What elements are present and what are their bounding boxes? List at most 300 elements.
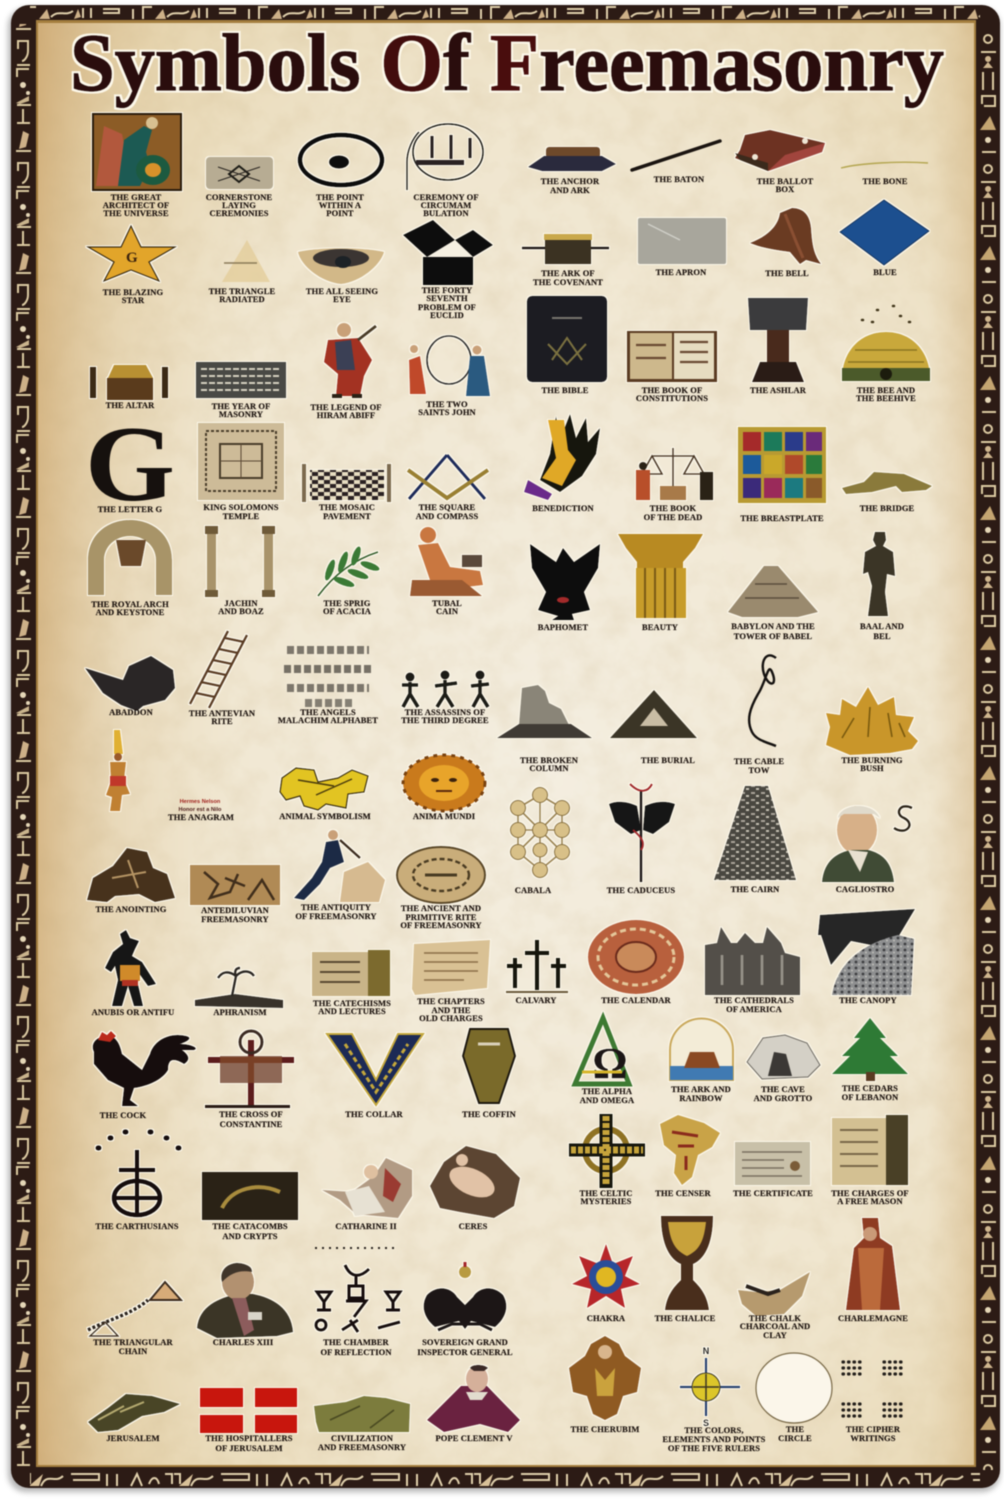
label: POPE CLEMENT V bbox=[435, 1433, 513, 1443]
label: CIRCUMAM bbox=[421, 200, 471, 210]
label: THE BEE AND bbox=[857, 385, 915, 395]
icon: eye bbox=[298, 248, 384, 284]
icon: map fragment bbox=[190, 865, 280, 905]
label: RAINBOW bbox=[679, 1093, 723, 1103]
icon: ark with poles bbox=[522, 234, 609, 264]
label: EUCLID bbox=[430, 310, 464, 320]
icon: robed king bbox=[846, 1218, 900, 1310]
label: OF JERUSALEM bbox=[215, 1443, 283, 1453]
icon: double headed eagle bbox=[424, 1262, 506, 1330]
symbol: babylon tower bbox=[728, 566, 818, 641]
label: THE GREAT bbox=[111, 192, 162, 202]
label: STAR bbox=[122, 295, 145, 305]
symbol: ballot box bbox=[735, 130, 825, 194]
icon: coffin bbox=[463, 1029, 515, 1103]
label: THE CIPHER bbox=[846, 1424, 901, 1434]
label: THE BELL bbox=[765, 268, 809, 278]
label: THE CENSER bbox=[655, 1188, 712, 1198]
symbol: anagram bbox=[106, 730, 234, 822]
label: CONSTANTINE bbox=[220, 1119, 283, 1129]
symbol: chalk charcoal and clay bbox=[738, 1272, 810, 1340]
icon: celtic cross bbox=[569, 1114, 645, 1188]
symbol: anima mundi bbox=[403, 755, 485, 821]
label: AND KEYSTONE bbox=[96, 607, 165, 617]
symbol: certificate bbox=[733, 1142, 813, 1198]
symbol: anointing bbox=[87, 848, 175, 914]
symbol: book of constitutions bbox=[627, 331, 717, 403]
icon: dot clusters bbox=[843, 1362, 906, 1416]
label: MASONRY bbox=[219, 409, 263, 419]
symbol: point within a point bbox=[300, 135, 382, 218]
symbol: breastplate bbox=[738, 427, 826, 523]
symbol: chalice bbox=[655, 1216, 716, 1323]
label: OLD CHARGES bbox=[419, 1013, 483, 1023]
label: AND CRYPTS bbox=[222, 1231, 278, 1241]
label: ANIMA MUNDI bbox=[413, 811, 476, 821]
symbol: beauty bbox=[618, 534, 703, 632]
label: THE CALENDAR bbox=[601, 995, 671, 1005]
icon: egyptian figure bbox=[106, 730, 130, 811]
icon: baton stick bbox=[632, 141, 720, 170]
icon: black rooster bbox=[93, 1031, 196, 1106]
icon: green sprig bbox=[318, 545, 381, 596]
icon: faint triangle bbox=[222, 240, 270, 282]
label: THE ANTEVIAN bbox=[189, 708, 256, 718]
label: THE ARK AND bbox=[671, 1084, 731, 1094]
icon: mason at rock bbox=[294, 830, 385, 902]
label: OF FREEMASONRY bbox=[400, 920, 482, 930]
label: CHARLEMAGNE bbox=[838, 1313, 908, 1323]
label: CHAKRA bbox=[587, 1313, 626, 1323]
icon: empress figure bbox=[322, 1158, 412, 1218]
icon: thin bone line bbox=[841, 162, 928, 168]
label: THE ANTIQUITY bbox=[301, 902, 371, 912]
icon: arch and keystone bbox=[88, 520, 172, 595]
symbol: anchor and ark bbox=[528, 147, 616, 195]
label: THE UNIVERSE bbox=[103, 208, 169, 218]
label: ELEMENTS AND POINTS bbox=[663, 1434, 766, 1444]
symbol: royal arch bbox=[88, 520, 172, 617]
label: THE HOSPITALLERS bbox=[205, 1433, 293, 1443]
label: THE CATACOMBS bbox=[212, 1221, 288, 1231]
symbol: cabala bbox=[510, 788, 570, 895]
symbol: catacombs bbox=[202, 1172, 298, 1241]
symbol: celtic mysteries bbox=[569, 1114, 645, 1206]
symbol: triangular chain bbox=[88, 1282, 181, 1356]
icon: tower mound bbox=[728, 566, 818, 617]
symbol: cornerstone bbox=[206, 157, 273, 218]
label: CHAIN bbox=[119, 1346, 148, 1356]
label: TEMPLE bbox=[223, 511, 259, 521]
symbol: bone bbox=[841, 162, 928, 186]
label: THE LETTER G bbox=[98, 504, 163, 514]
label: THE ALPHA bbox=[582, 1086, 633, 1096]
symbol: cherubim bbox=[569, 1336, 641, 1434]
label: THE BLAZING bbox=[103, 287, 163, 297]
label: THE CHAPTERS bbox=[417, 996, 485, 1006]
label: CATHARINE II bbox=[335, 1221, 397, 1231]
label: THE COLLAR bbox=[345, 1109, 403, 1119]
label: CLAY bbox=[763, 1330, 787, 1340]
icon: cathedral bbox=[705, 927, 800, 995]
label: THE BONE bbox=[863, 176, 908, 186]
icon: pythagoras squares bbox=[403, 220, 493, 285]
label: THE CELTIC bbox=[580, 1188, 632, 1198]
symbol: cable tow bbox=[734, 655, 784, 775]
label: CORNERSTONE bbox=[206, 192, 273, 202]
icon: altar chest bbox=[93, 365, 165, 400]
label: AND OMEGA bbox=[580, 1095, 635, 1105]
label: OF ACACIA bbox=[323, 606, 372, 616]
label: THE APRON bbox=[656, 267, 707, 277]
label: THE BURNING bbox=[841, 755, 903, 765]
label: THE ANCIENT AND bbox=[401, 903, 481, 913]
symbol: blue bbox=[840, 200, 929, 277]
label: CALVARY bbox=[515, 995, 557, 1005]
label: THE CEDARS bbox=[842, 1083, 898, 1093]
label: OF LEBANON bbox=[842, 1092, 899, 1102]
icon: robed pope bbox=[427, 1365, 520, 1432]
symbol: chakra bbox=[572, 1244, 640, 1323]
label: ANTEDILUVIAN bbox=[201, 905, 270, 915]
label: CABALA bbox=[515, 885, 552, 895]
icon: portrait bust bbox=[197, 1263, 293, 1338]
label: THE ALL SEEING bbox=[306, 286, 378, 296]
icon: ark on waves bbox=[528, 147, 616, 171]
label: MALACHIM ALPHABET bbox=[278, 715, 378, 725]
icon: coloured stones bbox=[738, 427, 826, 503]
icon: three crosses bbox=[506, 940, 568, 992]
symbol: cipher writings bbox=[843, 1362, 906, 1443]
symbol: anubis bbox=[92, 930, 174, 1017]
symbol: charges of a free mason bbox=[831, 1115, 909, 1206]
icon: coloured star bbox=[572, 1244, 640, 1308]
icon: bound papers bbox=[312, 950, 390, 996]
symbol: baphomet bbox=[530, 544, 600, 632]
label: RADIATED bbox=[219, 294, 265, 304]
icon: dark group bbox=[87, 848, 175, 902]
icon: red flag cross bbox=[200, 1388, 297, 1433]
icon: cornerstone block bbox=[206, 157, 273, 189]
label: THE BEEHIVE bbox=[856, 393, 916, 403]
label: THE TRIANGULAR bbox=[93, 1337, 173, 1347]
label: THE CABLE bbox=[734, 756, 784, 766]
label: THE CAVE bbox=[761, 1084, 805, 1094]
icon: compass and square bbox=[408, 455, 488, 499]
label: THE TWO bbox=[426, 399, 468, 409]
label: BEL bbox=[873, 631, 891, 641]
symbol: ark of covenant bbox=[522, 234, 609, 287]
label: THE CATHEDRALS bbox=[714, 995, 794, 1005]
title: Symbols Of Freemasonry bbox=[70, 17, 944, 108]
label: THE ROYAL ARCH bbox=[91, 599, 169, 609]
icon: three silhouettes bbox=[402, 671, 489, 707]
symbol: antediluvian bbox=[190, 865, 280, 924]
label: SOVEREIGN GRAND bbox=[422, 1337, 508, 1347]
symbol: coffin bbox=[462, 1029, 517, 1119]
symbol: blazing star bbox=[88, 226, 175, 305]
label: THE THIRD DEGREE bbox=[401, 715, 489, 725]
icon: staff and wings bbox=[609, 784, 675, 882]
icon: costumed figure bbox=[324, 323, 376, 396]
icon: sun face bbox=[403, 755, 485, 811]
symbol: burning bush bbox=[826, 687, 918, 773]
label: MYSTERIES bbox=[581, 1196, 632, 1206]
icon: tree of life bbox=[510, 788, 570, 878]
symbol: caduceus bbox=[607, 784, 675, 895]
icon: scroll bbox=[412, 940, 490, 995]
icon: ornate censer bbox=[660, 1115, 720, 1185]
label: CERES bbox=[459, 1221, 488, 1231]
icon: compass cross: N bbox=[703, 1346, 709, 1356]
label: THE MOSAIC bbox=[319, 502, 375, 512]
label: BULATION bbox=[423, 208, 470, 218]
symbol: civilization and freemasonry bbox=[314, 1396, 410, 1452]
label: THE CHERUBIM bbox=[571, 1424, 639, 1434]
label: CAIN bbox=[436, 606, 459, 616]
label: SEVENTH bbox=[426, 293, 468, 303]
label: THE ASSASSINS OF bbox=[405, 707, 485, 717]
decorative bees bbox=[862, 306, 910, 322]
label: THE SPRIG bbox=[324, 598, 371, 608]
label: CHARCOAL AND bbox=[740, 1321, 810, 1331]
label: OF THE DEAD bbox=[644, 512, 702, 522]
symbol: bee and beehive bbox=[842, 306, 930, 403]
symbol: abaddon bbox=[85, 656, 175, 717]
symbol: antiquity of freemasonry bbox=[294, 830, 385, 921]
label: COLUMN bbox=[529, 763, 569, 773]
symbol: calendar bbox=[588, 920, 684, 1005]
label: THE CHALK bbox=[749, 1313, 801, 1323]
icon: round stone calendar bbox=[588, 920, 684, 994]
symbol: square and compass bbox=[408, 455, 488, 521]
symbol: cave and grotto bbox=[747, 1035, 820, 1103]
symbol: jerusalem bbox=[88, 1394, 180, 1443]
label: THE CHARGES OF bbox=[831, 1188, 909, 1198]
symbol: hospitallers of jerusalem bbox=[200, 1388, 297, 1453]
symbol: baton bbox=[632, 141, 720, 184]
symbol: ashlar bbox=[748, 298, 808, 395]
label: THE BROKEN bbox=[520, 755, 579, 765]
label: ABADDON bbox=[109, 707, 154, 717]
icon: triangle and omega: Ω bbox=[592, 1039, 628, 1088]
symbol: two saints john bbox=[409, 336, 490, 417]
label: THE CHAMBER bbox=[323, 1337, 390, 1347]
icon: blue diamond bbox=[840, 200, 929, 265]
icon: brown bell bbox=[750, 208, 821, 264]
symbol: ancient and primitive rite bbox=[397, 847, 485, 930]
symbol: charlemagne bbox=[838, 1218, 908, 1323]
label: AND ARK bbox=[550, 185, 590, 195]
symbol: tubal cain bbox=[410, 527, 483, 616]
icon: ladder bbox=[190, 631, 247, 708]
label: THE ARK OF bbox=[541, 268, 595, 278]
symbol: sovereign grand inspector bbox=[417, 1262, 513, 1357]
label: CAGLIOSTRO bbox=[836, 884, 895, 894]
label: THE COCK bbox=[100, 1110, 146, 1120]
icon: open book bbox=[627, 331, 717, 382]
icon: dark crypt bbox=[202, 1172, 298, 1220]
label: CEREMONY OF bbox=[413, 192, 479, 202]
symbol: cagliostro bbox=[822, 806, 912, 894]
icon: orb and cross bbox=[98, 1132, 179, 1215]
symbol: charters bbox=[412, 940, 490, 1023]
symbol: ceres bbox=[430, 1146, 520, 1231]
symbol: colors elements points bbox=[663, 1346, 766, 1453]
symbol: bell bbox=[750, 208, 821, 278]
label: THE SQUARE bbox=[419, 502, 475, 512]
label: BABYLON AND THE bbox=[731, 621, 815, 631]
icon: yellow lions bbox=[280, 768, 368, 810]
symbol: all seeing eye bbox=[298, 248, 384, 304]
label: THE COLORS, bbox=[684, 1425, 744, 1435]
symbol: antevian rite bbox=[189, 631, 256, 726]
label: APHRANISM bbox=[213, 1007, 267, 1017]
label: A FREE MASON bbox=[837, 1196, 903, 1206]
icon: dark plaque bbox=[196, 362, 286, 398]
icon: temple plan bbox=[198, 423, 284, 500]
icon: two pillars bbox=[205, 526, 275, 597]
label: THE BRIDGE bbox=[860, 503, 915, 513]
label: CIVILIZATION bbox=[331, 1433, 394, 1443]
label: ANUBIS OR ANTIFU bbox=[92, 1007, 174, 1017]
label: BENEDICTION bbox=[532, 503, 595, 513]
label: BLUE bbox=[873, 267, 897, 277]
icon: stone pile bbox=[714, 786, 796, 880]
label: OF AMERICA bbox=[726, 1004, 783, 1014]
label: THE CERTIFICATE bbox=[733, 1188, 813, 1198]
symbol: jachin and boaz bbox=[205, 526, 275, 616]
symbol: alpha and omega bbox=[575, 1018, 635, 1105]
anagram phrase: Hermes Nelson bbox=[180, 799, 221, 805]
label: THE POINT bbox=[316, 192, 364, 202]
symbol: book of the dead bbox=[636, 448, 713, 522]
label: AND COMPASS bbox=[416, 511, 478, 521]
label: THE CANOPY bbox=[839, 995, 897, 1005]
symbol: cathedrals bbox=[705, 927, 800, 1014]
symbol: great architect bbox=[93, 114, 181, 218]
icon: circle and dot bbox=[300, 135, 382, 185]
label: THE ANAGRAM bbox=[168, 812, 234, 822]
label: THE BOOK OF bbox=[642, 385, 702, 395]
icon: winged angel bbox=[569, 1336, 641, 1420]
label: THE CHALICE bbox=[655, 1313, 716, 1323]
label: INSPECTOR GENERAL bbox=[417, 1347, 513, 1357]
symbol: cairn bbox=[714, 786, 796, 894]
label: THE COVENANT bbox=[533, 277, 603, 287]
label: THE YEAR OF bbox=[212, 401, 270, 411]
icon: thin circle bbox=[756, 1353, 832, 1423]
icon: box bbox=[735, 130, 825, 171]
label: BOX bbox=[776, 184, 795, 194]
symbol: cedars of lebanon bbox=[832, 1018, 908, 1102]
label: THE LEGEND OF bbox=[310, 402, 382, 412]
label: TUBAL bbox=[432, 598, 462, 608]
symbol: burial bbox=[610, 690, 697, 765]
symbol: broken column bbox=[497, 685, 592, 773]
symbol: bridge bbox=[842, 472, 932, 513]
symbol: year of masonry bbox=[196, 362, 286, 419]
label: RITE bbox=[211, 716, 233, 726]
icon: green cedar bbox=[832, 1018, 908, 1081]
symbol: canopy bbox=[818, 909, 915, 1005]
icon: corinthian column bbox=[618, 534, 703, 618]
symbol: aphranism bbox=[195, 968, 283, 1017]
icon: pyramid bbox=[610, 690, 697, 738]
icon: open old book bbox=[832, 1115, 908, 1185]
icon: document bbox=[735, 1142, 810, 1185]
icon: rocks bbox=[738, 1272, 810, 1316]
icon: draped canopy bbox=[818, 909, 915, 995]
label: BAAL AND bbox=[860, 621, 904, 631]
label: OF FREEMASONRY bbox=[295, 911, 377, 921]
label: BEAUTY bbox=[642, 622, 678, 632]
icon: egyptian scale bbox=[636, 448, 713, 500]
label: HIRAM ABIFF bbox=[317, 410, 375, 420]
label: THE CAIRN bbox=[731, 884, 780, 894]
symbol: catharine ii bbox=[322, 1158, 412, 1231]
label: THE BALLOT bbox=[757, 176, 813, 186]
label: THE FORTY bbox=[422, 285, 472, 295]
label: PRIMITIVE RITE bbox=[405, 912, 477, 922]
icon: stone bridge bbox=[842, 472, 932, 494]
symbol: chamber of reflection bbox=[315, 1248, 400, 1357]
symbol: malachim alphabet bbox=[278, 650, 378, 725]
label: ANIMAL SYMBOLISM bbox=[279, 811, 371, 821]
label: JERUSALEM bbox=[106, 1433, 160, 1443]
icon: circle and candles bbox=[407, 124, 483, 190]
label: BUSH bbox=[860, 763, 884, 773]
symbol: benediction bbox=[524, 414, 600, 513]
label: AND THE bbox=[431, 1005, 471, 1015]
symbol: ark and rainbow bbox=[670, 1019, 733, 1103]
symbol: king solomons temple bbox=[198, 423, 284, 521]
icon: dark winged creature bbox=[85, 656, 175, 711]
label: EYE bbox=[333, 294, 351, 304]
label: JACHIN bbox=[224, 598, 258, 608]
symbol: circle bbox=[756, 1353, 832, 1443]
anagram phrase: Honor est a Nilo bbox=[179, 807, 222, 813]
label: AND BOAZ bbox=[218, 606, 264, 616]
icon: dark idol bbox=[863, 532, 895, 616]
label: WRITINGS bbox=[850, 1433, 896, 1443]
icon: beehive bbox=[842, 332, 930, 381]
icon: rainbow over ark bbox=[670, 1019, 733, 1080]
label: CEREMONIES bbox=[209, 208, 269, 218]
icon: cross bbox=[205, 1031, 294, 1108]
icon: chain and triangles bbox=[88, 1282, 181, 1336]
icon: ruined column bbox=[497, 685, 592, 738]
icon: pale cave bbox=[747, 1035, 820, 1079]
icon: olive terrain bbox=[314, 1396, 410, 1432]
icon: golden bush bbox=[826, 687, 918, 755]
symbol: calvary bbox=[506, 940, 568, 1005]
label: LAYING bbox=[222, 200, 256, 210]
icon: blessing hand bbox=[524, 414, 600, 500]
icon: compass cross: S bbox=[703, 1418, 709, 1428]
symbol: altar bbox=[93, 365, 165, 410]
label: THE CADUCEUS bbox=[607, 885, 675, 895]
label: OF THE FIVE RULERS bbox=[668, 1443, 760, 1453]
label: PAVEMENT bbox=[323, 511, 371, 521]
label: BAPHOMET bbox=[538, 622, 588, 632]
symbol: assassins bbox=[401, 671, 489, 725]
label: THE BREASTPLATE bbox=[740, 513, 824, 523]
decorative cipher row bbox=[315, 1247, 397, 1249]
label: THE CARTHUSIANS bbox=[95, 1221, 179, 1231]
symbol: charles xiii bbox=[197, 1263, 293, 1347]
icon: masonic collar bbox=[327, 1034, 423, 1105]
